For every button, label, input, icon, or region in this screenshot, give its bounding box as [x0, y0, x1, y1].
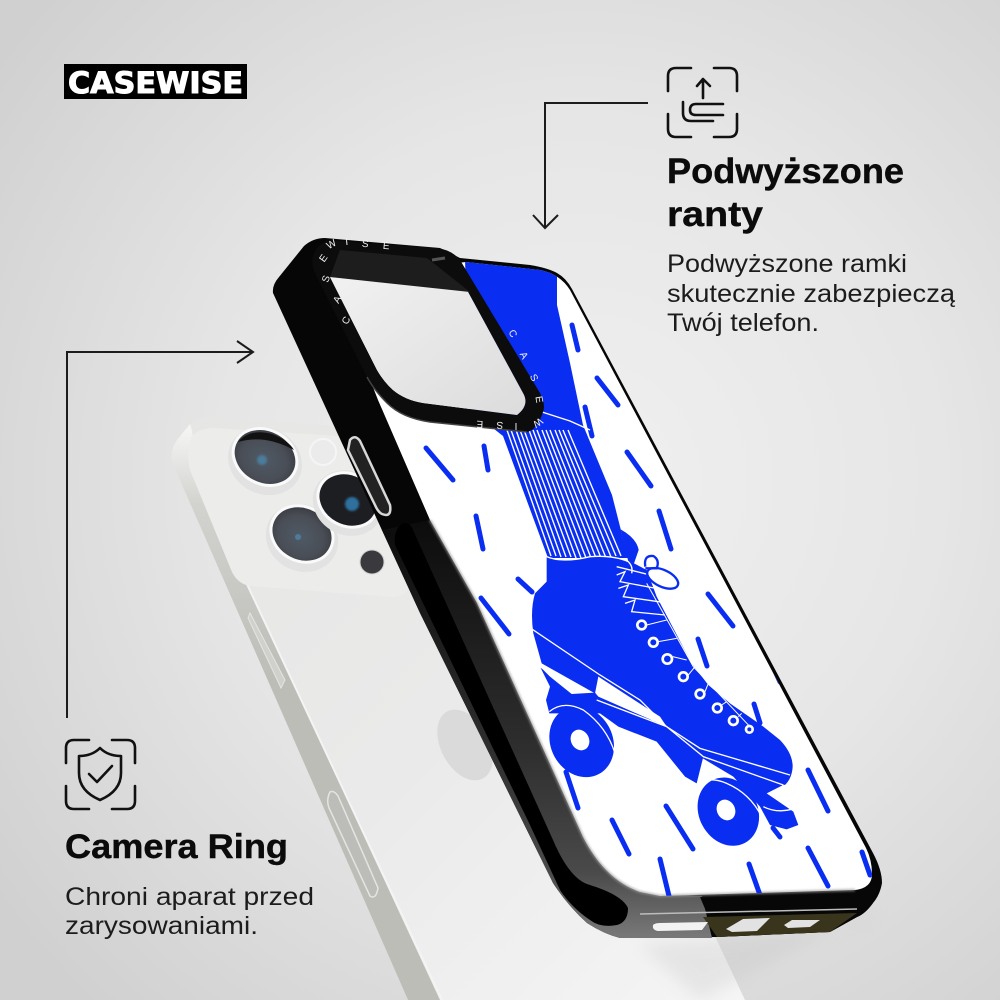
- side button: [348, 437, 390, 515]
- ring lettering: S: [527, 373, 540, 384]
- heading: Podwyższone ranty: ranty: [667, 195, 764, 234]
- arrow: to raised edges: [533, 103, 648, 228]
- bottom ports: [653, 922, 708, 931]
- ring lettering: E: [382, 241, 390, 252]
- arrow: to camera ring: [67, 341, 253, 718]
- heading: Camera Ring: Camera Ring: [65, 828, 288, 866]
- ring lettering: S: [320, 274, 333, 284]
- olive bottom wall: [703, 913, 857, 937]
- ring lettering: W: [325, 237, 339, 252]
- inner edge shadow: [430, 520, 855, 896]
- heading: Podwyższone ranty: [667, 152, 904, 234]
- ring lettering: S: [361, 239, 369, 250]
- sensor: [360, 550, 384, 574]
- soft case shadow: [640, 905, 880, 1000]
- ring lettering: S: [496, 419, 503, 430]
- blue leg: [465, 260, 628, 558]
- heading: Podwyższone ranty: Podwyższone: [667, 152, 904, 191]
- wheels: [537, 695, 626, 789]
- lace bow: [644, 556, 681, 593]
- apple logo: [426, 700, 504, 790]
- sock stripes: [507, 412, 621, 558]
- side buttons: [248, 613, 285, 688]
- black side slit: [395, 523, 628, 926]
- window seen through: [330, 277, 525, 415]
- ring lettering: I: [345, 237, 349, 248]
- flash: [310, 439, 336, 465]
- ring lettering: E: [476, 418, 483, 429]
- boot: [532, 529, 793, 785]
- case body: [273, 238, 882, 938]
- ring lettering: C: [506, 328, 519, 340]
- icon: raised edges: [668, 68, 737, 137]
- ring lettering: A: [331, 294, 344, 305]
- lace lines: [647, 583, 750, 727]
- icon: shield with check: [66, 740, 135, 809]
- black case: [273, 238, 882, 938]
- heel plate and truck: [540, 667, 703, 783]
- lens right: [301, 458, 395, 548]
- ring lettering: W: [530, 415, 544, 430]
- ring lettering: C: [340, 315, 353, 327]
- phone side rim: [172, 424, 440, 1000]
- white phone behind the case: [172, 414, 745, 1000]
- text: raised edges description: Twój telefon.: [667, 309, 819, 337]
- ring lettering: E: [318, 252, 331, 264]
- ring lettering: [318, 237, 545, 431]
- logo: CASEWISE: CASEWISE: [68, 66, 243, 100]
- eyelets: [637, 621, 753, 733]
- camera ring: [312, 237, 545, 432]
- ring lettering: E: [532, 395, 545, 404]
- camera plateau: [188, 428, 408, 597]
- rain dashes: [426, 325, 870, 896]
- translucent lower rail: [382, 520, 712, 938]
- ring frame with window: [312, 240, 544, 432]
- roller skate: [532, 529, 798, 857]
- text: raised edges description: Podwyższone ramki: [667, 250, 907, 278]
- text: raised edges description: [667, 250, 955, 337]
- inner wall: [330, 250, 470, 292]
- text: raised edges description: skutecznie zabezpieczą: [667, 280, 955, 308]
- text: camera ring description: zarysowaniami.: [65, 912, 258, 940]
- lens middle: [254, 491, 350, 585]
- ring lettering: I: [515, 420, 517, 431]
- text: camera ring description: Chroni aparat przed: [65, 883, 314, 911]
- ring lettering: A: [517, 350, 530, 362]
- text: camera ring description: [65, 883, 314, 940]
- white detail lines: [532, 556, 792, 817]
- white printed back: [330, 260, 872, 896]
- lens top: [216, 414, 314, 508]
- phone back panel: [172, 417, 745, 1000]
